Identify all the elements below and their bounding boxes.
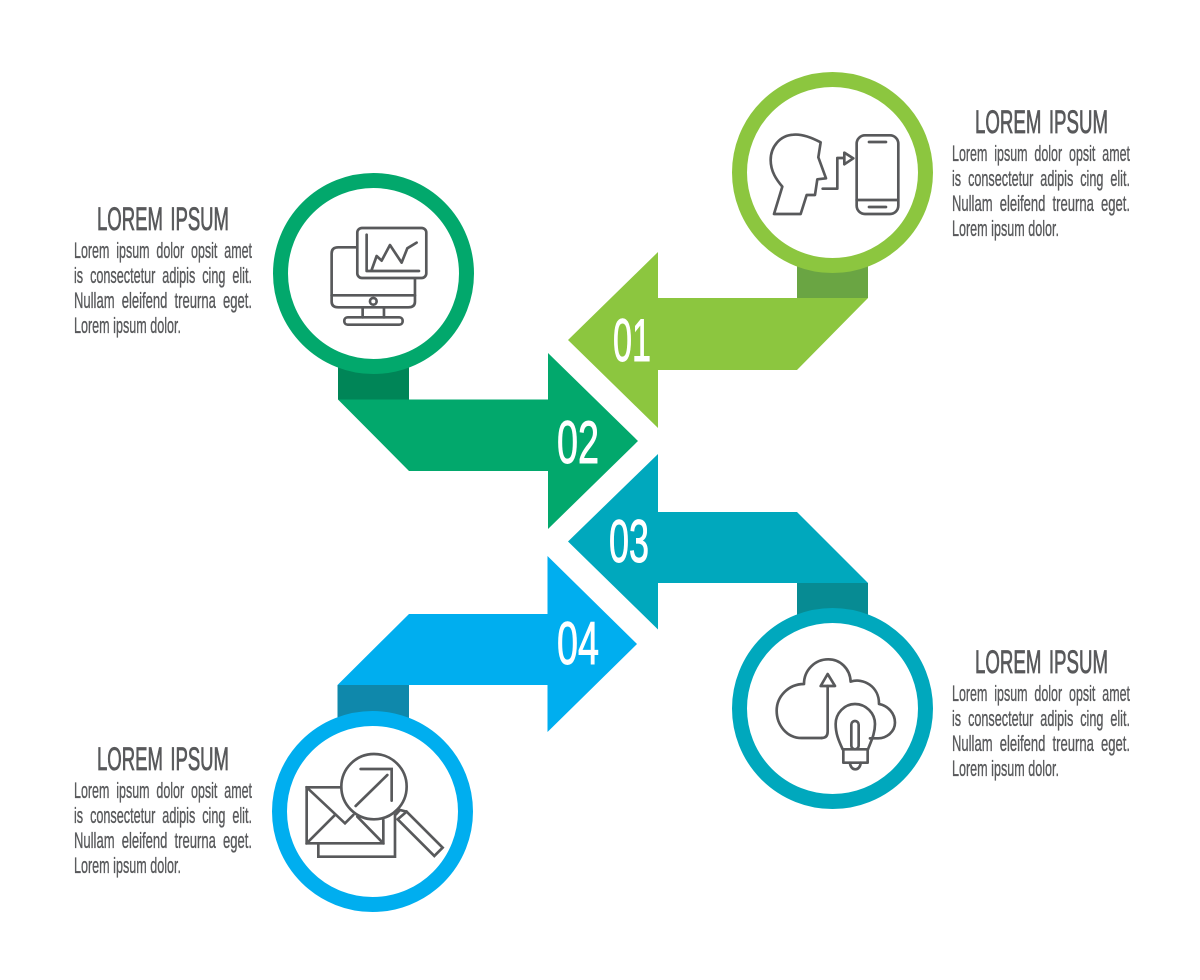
arrow 01 xyxy=(568,252,868,428)
connector tab 04 xyxy=(338,685,409,721)
circle 03 xyxy=(740,616,926,802)
icon: head speaking to phone xyxy=(771,135,898,214)
text block 01 xyxy=(952,141,1130,241)
icon: monitor with chart xyxy=(332,228,426,325)
text block 04: is consectetur adipis cing elit. xyxy=(74,803,252,828)
text block 02: Nullam eleifend treurna eget. xyxy=(74,288,252,313)
heading 01: LOREM IPSUM xyxy=(975,104,1108,140)
text block 02: Lorem ipsum dolor. xyxy=(74,313,181,338)
connector tab 02 xyxy=(338,360,409,400)
connector tab 01 xyxy=(797,258,868,298)
text block 04: Lorem ipsum dolor opsit amet xyxy=(74,778,252,803)
text block 02: Lorem ipsum dolor opsit amet xyxy=(74,238,252,263)
arrow 04 xyxy=(338,556,637,732)
connector tab 03 xyxy=(797,583,868,623)
heading 03: LOREM IPSUM xyxy=(975,644,1108,680)
text block 04: Lorem ipsum dolor. xyxy=(74,853,181,878)
heading 04: LOREM IPSUM xyxy=(97,741,229,777)
icon: envelopes with magnifying glass xyxy=(307,754,443,857)
heading 02: LOREM IPSUM xyxy=(97,201,229,237)
text block 04: Nullam eleifend treurna eget. xyxy=(74,828,252,853)
panel: step 01 xyxy=(568,80,1130,428)
arrow 03 xyxy=(568,454,868,630)
circle 02 xyxy=(280,180,466,366)
panel: step 03 xyxy=(568,454,1130,802)
text block 02 xyxy=(74,238,252,338)
icon: cloud with arrow and light bulb xyxy=(777,659,895,769)
number 04: 04 xyxy=(557,610,599,677)
number 02: 02 xyxy=(557,409,599,476)
text block 04 xyxy=(74,778,252,878)
text block 03: Lorem ipsum dolor. xyxy=(952,756,1059,781)
number 03: 03 xyxy=(609,508,649,575)
panel: step 02 xyxy=(74,180,638,529)
text block 02: is consectetur adipis cing elit. xyxy=(74,263,252,288)
circle 04 xyxy=(280,718,466,904)
panel: step 04 xyxy=(74,556,637,904)
text block 01: Lorem ipsum dolor. xyxy=(952,216,1059,241)
circle 01 xyxy=(740,80,926,266)
number 01: 01 xyxy=(613,307,651,374)
text block 03 xyxy=(952,681,1130,781)
arrow 02 xyxy=(338,353,638,529)
